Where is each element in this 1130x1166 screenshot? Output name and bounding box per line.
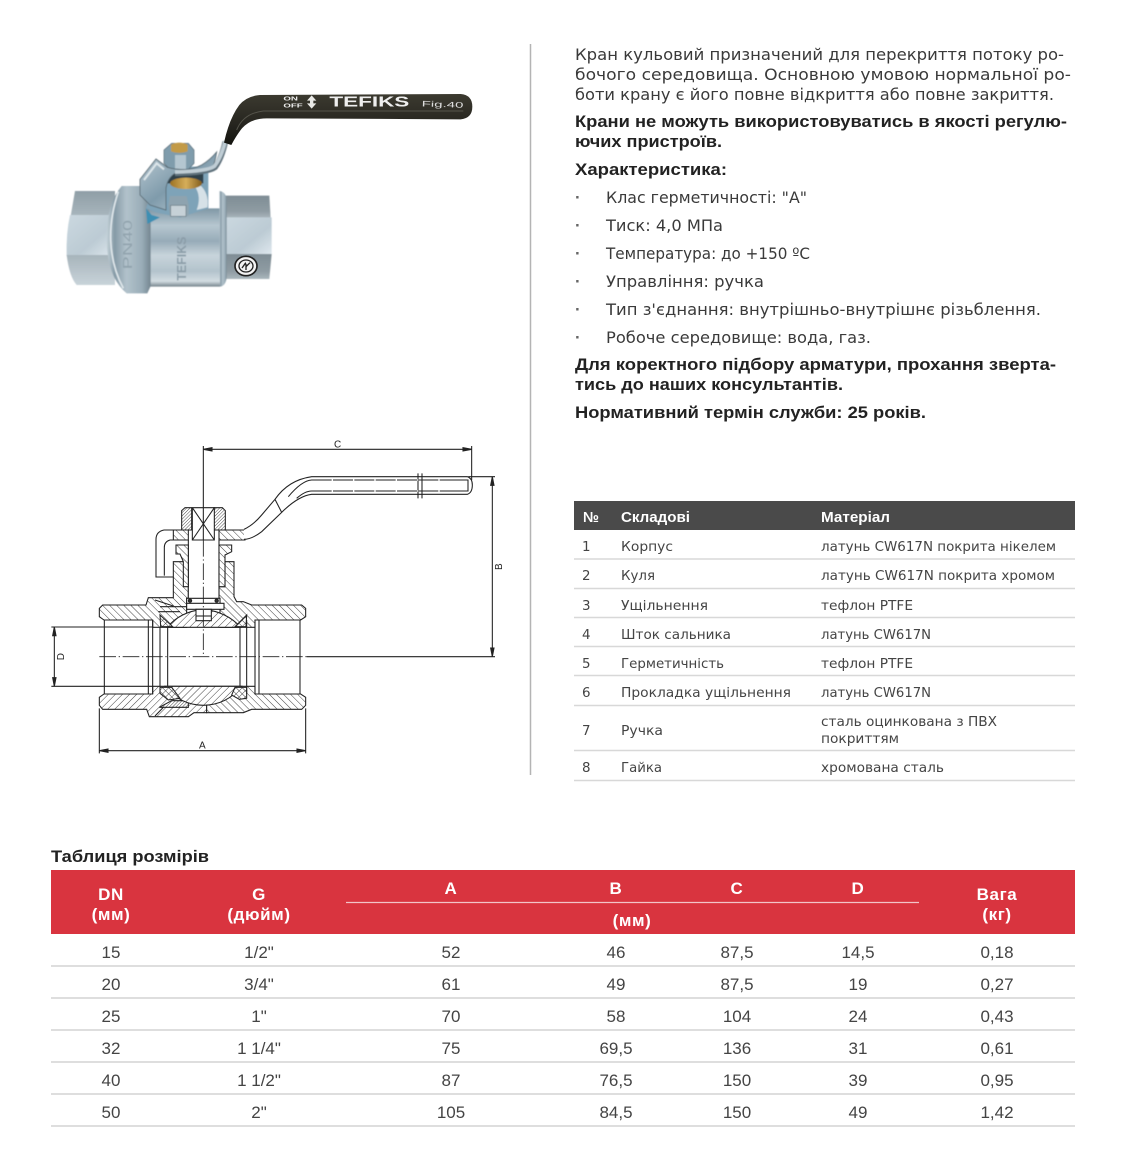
- DN 15 row: 1/2": [244, 943, 274, 962]
- row 1: [582, 540, 1056, 555]
- lever strip: [175, 142, 225, 173]
- row 8: [582, 761, 944, 776]
- row 4: [582, 628, 931, 643]
- DN 20 row: 19: [849, 975, 867, 994]
- size table header: B: [610, 879, 622, 898]
- brass cap: [171, 143, 188, 153]
- lower left wall: [99, 686, 207, 717]
- square stem head: [192, 508, 214, 540]
- size table title: Таблиця розмірів: [51, 847, 209, 866]
- size table header: D: [852, 879, 864, 898]
- brass washer: [170, 178, 202, 189]
- gland nut: [176, 545, 232, 587]
- DN 25 row: 104: [723, 1007, 751, 1026]
- DN 25 row: 58: [607, 1007, 625, 1026]
- DN 32 row: 32: [102, 1039, 120, 1058]
- characteristics list: ·: [575, 244, 581, 263]
- lettering on collar: PN40: [120, 220, 135, 269]
- row 5: [582, 657, 913, 672]
- right ring: [219, 191, 227, 287]
- row 3: 3: [582, 599, 591, 614]
- DN 32 row: 69,5: [599, 1039, 633, 1058]
- row 6: [582, 686, 931, 701]
- collar bright edge: [111, 192, 123, 288]
- lower right wall: [207, 686, 306, 713]
- consultant note: тись до наших консультантів.: [575, 375, 843, 394]
- description text: [575, 46, 1071, 422]
- DN 25 row: 0,43: [980, 1007, 1014, 1026]
- row 8: хромована сталь: [821, 761, 944, 776]
- row 1: латунь CW617N покрита нікелем: [821, 540, 1056, 555]
- characteristics list: ·: [575, 300, 581, 319]
- row 3: тефлон PTFE: [821, 599, 913, 614]
- intro paragraph: боти крану є його повне відкриття або повне закриття.: [575, 86, 1054, 104]
- row 2: Куля: [621, 569, 655, 584]
- handle lettering: TEFIKS: [329, 95, 409, 111]
- dimension A: A: [199, 740, 206, 751]
- top nut: [164, 143, 194, 169]
- intro paragraph: Кран кульовий призначений для перекриття потоку ро-: [575, 46, 1064, 64]
- ball top: [167, 609, 241, 627]
- DN 25 row: 24: [849, 1007, 867, 1026]
- DN 32 row: 31: [849, 1039, 867, 1058]
- housing highlight: [195, 185, 208, 210]
- warning: Крани не можуть використовуватись в якості регулю-: [575, 112, 1067, 131]
- stop bracket: [156, 530, 173, 577]
- size table: [51, 870, 1075, 1126]
- row 1: Корпус: [621, 540, 673, 555]
- size table header: (кг): [982, 905, 1012, 924]
- DN 15 row: 14,5: [841, 943, 875, 962]
- row 6: латунь CW617N: [821, 686, 931, 701]
- DN 20 row: 87,5: [720, 975, 754, 994]
- DN 15 row: 46: [607, 943, 625, 962]
- row 2: [582, 569, 1055, 584]
- characteristics list: Тиск: 4,0 МПа: [605, 217, 723, 235]
- dimension D: [51, 627, 153, 686]
- DN 20 row: 61: [442, 975, 460, 994]
- DN 25 row: [102, 1007, 1014, 1026]
- technical drawing of valve: [51, 440, 505, 753]
- handle plate: [173, 530, 245, 540]
- characteristics list: ·: [575, 188, 581, 207]
- DN 50 row: 84,5: [599, 1103, 633, 1122]
- DN 32 row: [102, 1039, 1014, 1058]
- DN 40 row: 39: [849, 1071, 867, 1090]
- row 5: тефлон PTFE: [821, 657, 913, 672]
- bolt face: [171, 205, 186, 216]
- size table header: DN: [98, 885, 124, 904]
- DN 15 row: 15: [102, 943, 120, 962]
- DN 50 row: 2": [251, 1103, 267, 1122]
- row 3: Ущільнення: [621, 599, 708, 614]
- components table: [574, 501, 1075, 780]
- row 6: Прокладка ущільнення: [621, 686, 791, 701]
- intro paragraph: [575, 46, 1071, 104]
- dimension D: D: [56, 653, 67, 660]
- characteristics list: Робоче середовище: вода, газ.: [606, 329, 871, 347]
- DN 50 row: 49: [849, 1103, 867, 1122]
- upper flange inner lines: [155, 600, 187, 612]
- table header: Матеріал: [821, 510, 890, 526]
- vertical divider: [530, 44, 532, 775]
- DN 20 row: 20: [102, 975, 120, 994]
- DN 40 row: 0,95: [980, 1071, 1014, 1090]
- handle lettering: OFF: [283, 104, 304, 110]
- row 1: 1: [582, 540, 591, 555]
- DN 50 row: 105: [437, 1103, 465, 1122]
- size table header: G: [252, 885, 266, 904]
- row 7: 7: [582, 724, 591, 739]
- characteristics list: ·: [575, 216, 581, 235]
- DN 20 row: 0,27: [980, 975, 1014, 994]
- DN 15 row: 52: [442, 943, 460, 962]
- DN 40 row: 1 1/2": [237, 1071, 281, 1090]
- DN 40 row: 40: [102, 1071, 120, 1090]
- bolt: [168, 196, 189, 216]
- characteristics list: ·: [575, 272, 581, 291]
- DN 40 row: [102, 1071, 1014, 1090]
- row 8: Гайка: [621, 761, 662, 776]
- DN 50 row: 1,42: [980, 1103, 1014, 1122]
- black lever handle: [224, 94, 472, 145]
- size table header: [51, 870, 1075, 934]
- dimension A: [99, 708, 306, 753]
- nut facet: [175, 155, 186, 169]
- characteristics list: Клас герметичності: "А": [606, 189, 807, 207]
- right hex end: [225, 196, 272, 279]
- DN 40 row: 76,5: [599, 1071, 633, 1090]
- ball bottom: [165, 686, 242, 705]
- row 2: латунь CW617N покрита хромом: [821, 569, 1055, 584]
- dimension C: C: [334, 440, 341, 451]
- size table header: (мм): [613, 911, 651, 930]
- row 6: 6: [582, 686, 591, 701]
- intro paragraph: бочого середовища. Основною умовою нормальної ро-: [575, 66, 1071, 84]
- DN 25 row: 25: [102, 1007, 120, 1026]
- characteristics list: Тип з'єднання: внутрішньо-внутрішнє різьблення.: [605, 301, 1041, 319]
- centre lines: [99, 540, 307, 657]
- DN 50 row: [102, 1103, 1014, 1122]
- lever outline: [244, 477, 472, 539]
- certification mark: [235, 256, 257, 276]
- lettering on body: TEFIKS: [175, 237, 189, 281]
- size table header: A: [445, 879, 457, 898]
- row 3: [582, 599, 913, 614]
- DN 32 row: 136: [723, 1039, 751, 1058]
- table header: №: [583, 510, 599, 526]
- row 5: 5: [582, 657, 591, 672]
- dimension C: [203, 440, 472, 540]
- collar: [107, 186, 151, 293]
- central body: [147, 208, 220, 287]
- table header: Складові: [621, 510, 690, 526]
- handle lettering: ON: [283, 97, 298, 103]
- size table header: (мм): [92, 905, 130, 924]
- bore lines: [104, 620, 300, 694]
- stem housing: [146, 167, 208, 217]
- table header: [574, 501, 1075, 530]
- stem: [188, 540, 219, 600]
- DN 15 row: 87,5: [720, 943, 754, 962]
- characteristics list: Управління: ручка: [606, 273, 764, 291]
- DN 25 row: 1": [251, 1007, 267, 1026]
- row 7: Ручка: [621, 724, 663, 739]
- handle lettering: [283, 95, 465, 111]
- row 2: 2: [582, 569, 591, 584]
- seat rings: [160, 615, 247, 700]
- dimension B: B: [494, 563, 505, 570]
- handle lettering: Fig.40: [422, 99, 465, 110]
- DN 15 row: 0,18: [980, 943, 1014, 962]
- bright gap under bracket: [146, 208, 160, 224]
- bracket plate: [140, 152, 217, 210]
- upper right wall and housing: [219, 562, 306, 627]
- stem seal: [187, 598, 224, 609]
- warning: ючих пристроїв.: [575, 132, 722, 151]
- row 8: 8: [582, 761, 591, 776]
- housing shade: [166, 173, 203, 183]
- row 4: латунь CW617N: [821, 628, 931, 643]
- top nut: [182, 508, 225, 530]
- row 5: Герметичність: [621, 657, 724, 672]
- valve body: [67, 141, 272, 293]
- characteristics list: [575, 188, 1041, 347]
- dimension B: [307, 477, 505, 657]
- row 7: сталь оцинкована з ПВХ: [821, 715, 997, 730]
- upper left wall: [99, 562, 188, 627]
- DN 32 row: 0,61: [980, 1039, 1014, 1058]
- lower left inner flange: [155, 701, 188, 716]
- characteristics heading: Характеристика:: [575, 160, 727, 179]
- size table header: (дюйм): [227, 905, 291, 924]
- DN 50 row: 150: [723, 1103, 751, 1122]
- consultant note: Для коректного підбору арматури, прохання зверта-: [575, 355, 1056, 374]
- size table header: C: [731, 879, 743, 898]
- plate highlight: [144, 163, 164, 180]
- left hex end: [67, 191, 115, 285]
- handle highlight: [237, 111, 463, 130]
- characteristics list: Температура: до +150 ºC: [605, 245, 810, 263]
- DN 20 row: 3/4": [244, 975, 274, 994]
- service life: Нормативний термін служби: 25 років.: [575, 403, 926, 422]
- DN 32 row: 1 1/4": [237, 1039, 281, 1058]
- DN 20 row: 49: [607, 975, 625, 994]
- characteristics list: ·: [575, 328, 581, 347]
- DN 40 row: 87: [442, 1071, 460, 1090]
- warning: [575, 112, 1067, 151]
- row 7: [582, 715, 997, 747]
- DN 20 row: [102, 975, 1014, 994]
- DN 32 row: 75: [442, 1039, 460, 1058]
- row 4: 4: [582, 628, 591, 643]
- DN 50 row: 50: [102, 1103, 120, 1122]
- size table header: Вага: [977, 885, 1017, 904]
- row 4: Шток сальника: [621, 628, 731, 643]
- consultant note: [575, 355, 1056, 394]
- DN 40 row: 150: [723, 1071, 751, 1090]
- DN 25 row: 70: [442, 1007, 460, 1026]
- DN 15 row: [102, 943, 1014, 962]
- product photo: ball valve: [67, 94, 472, 293]
- row 7: покриттям: [821, 732, 899, 747]
